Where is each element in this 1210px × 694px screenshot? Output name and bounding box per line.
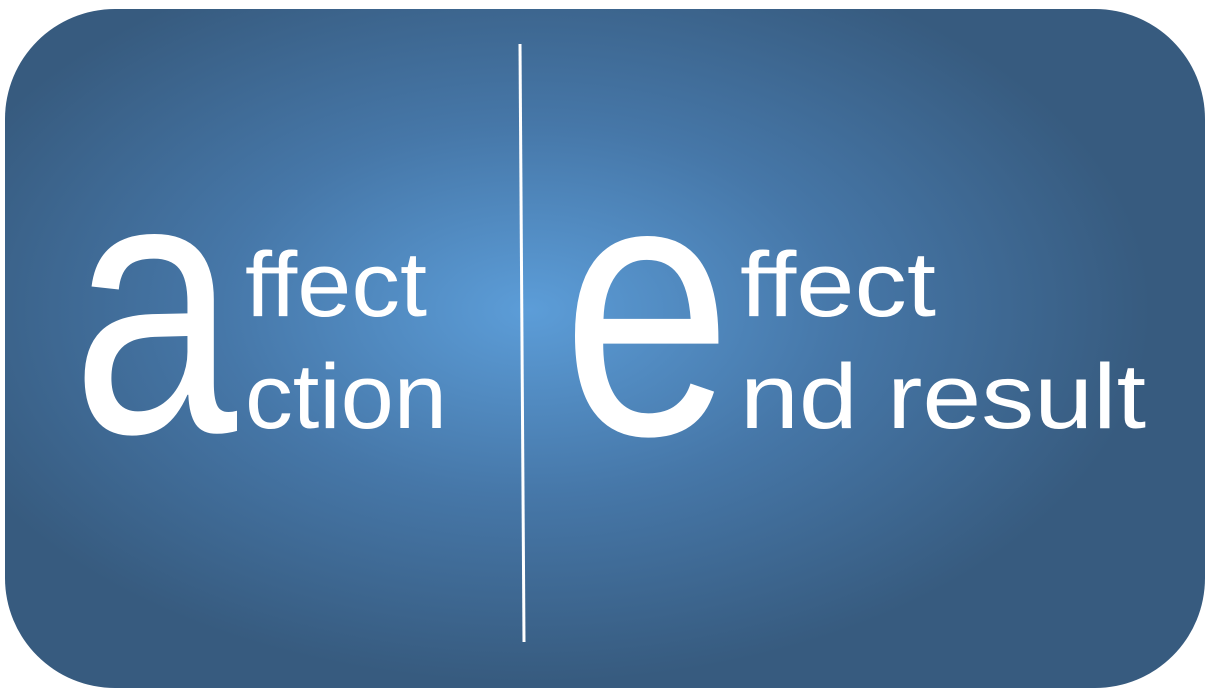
left group: affect / action xyxy=(72,99,447,510)
text: nd result: nd result xyxy=(740,346,1146,448)
text: ffect: ffect xyxy=(245,234,427,336)
right group: effect / end result xyxy=(562,101,1146,512)
text: ction: ction xyxy=(245,346,447,448)
big letter e: e xyxy=(562,101,732,512)
text: ffect: ffect xyxy=(740,234,936,336)
divider line xyxy=(520,44,524,642)
big letter a: a xyxy=(72,99,239,510)
